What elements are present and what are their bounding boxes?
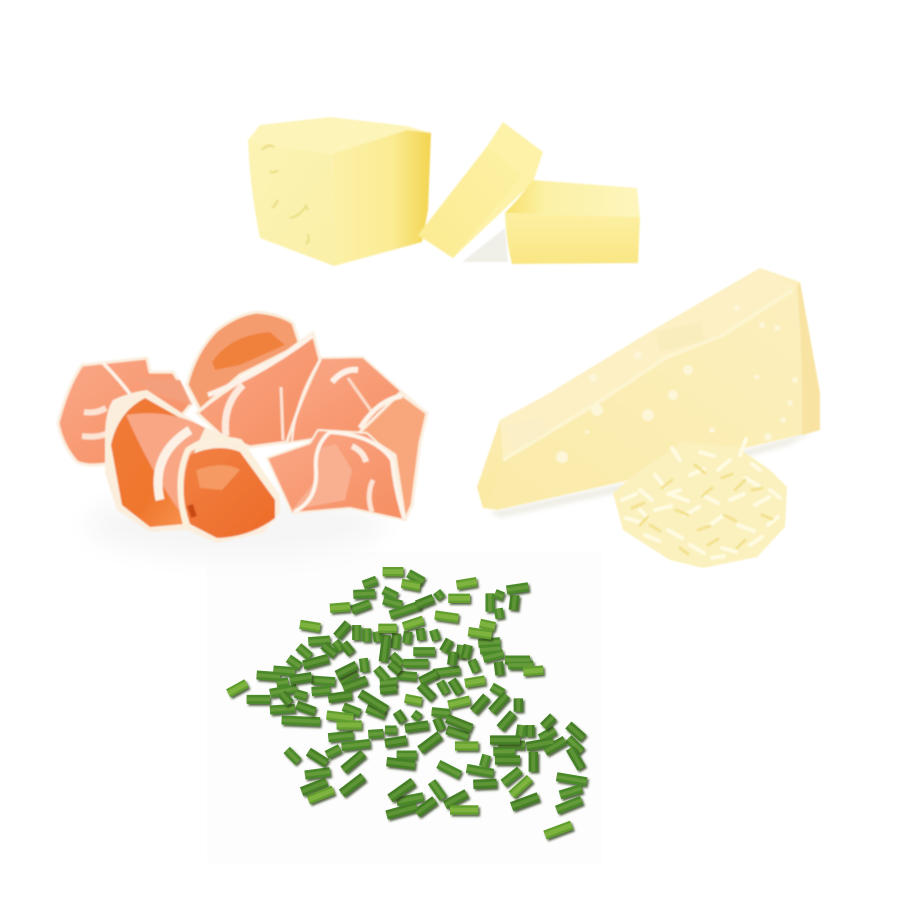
chives: [228, 572, 587, 835]
prosciutto: [58, 312, 427, 559]
parmesan: [477, 268, 820, 568]
prosciutto: shadow: [85, 491, 385, 559]
chives: dark pieces: [282, 595, 583, 815]
prosciutto: right curl: [360, 393, 427, 520]
parmesan: rind specks: [556, 305, 798, 463]
parmesan: grated pile: [613, 439, 787, 568]
prosciutto: front flap: [197, 333, 320, 447]
prosciutto: right flap: [287, 357, 427, 443]
butter: [248, 117, 640, 266]
prosciutto: left fold: [58, 358, 192, 465]
faint backdrop behind chives: [207, 552, 602, 864]
butter: ground shadow: [462, 228, 508, 262]
butter: middle slice: [418, 122, 543, 258]
prosciutto: shapes: [58, 312, 427, 543]
prosciutto: front roll: [105, 390, 280, 543]
prosciutto: lower right fold: [267, 430, 404, 520]
chives: mid pieces: [247, 573, 587, 810]
chives: bright pieces: [228, 572, 572, 835]
prosciutto: top back fold: [187, 312, 300, 410]
butter: right piece: [505, 180, 640, 264]
butter: large block: [248, 117, 431, 266]
parmesan: wedge: [477, 268, 820, 510]
parmesan: wedge shadow: [490, 430, 815, 518]
